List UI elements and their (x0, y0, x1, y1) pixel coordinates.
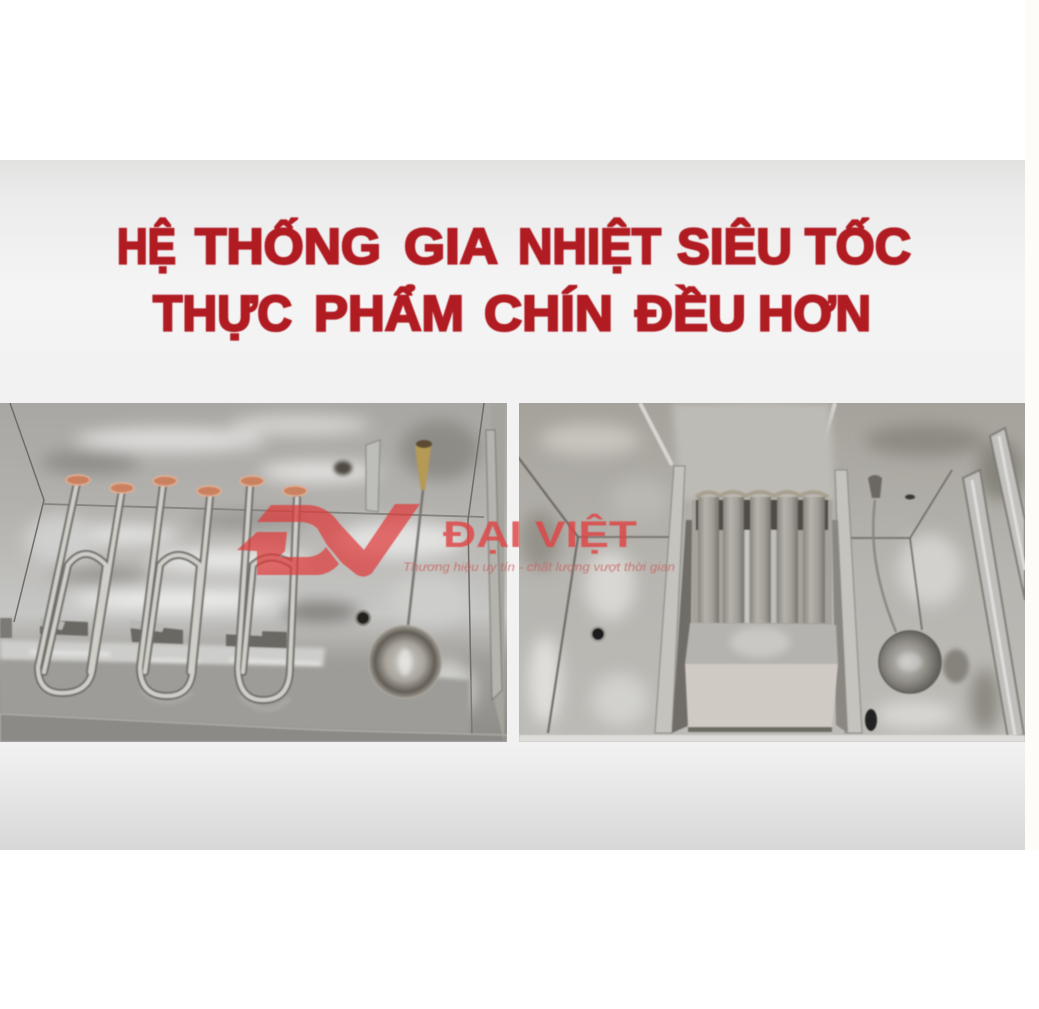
tagline: Thương hiệu uy tín - chất lượng vượt thời gian (403, 562, 675, 574)
heater elements (38, 483, 297, 700)
front lip (519, 735, 1025, 742)
burner recess (692, 500, 832, 625)
right tubes (963, 428, 1025, 738)
rails (655, 466, 862, 733)
title: ĐỀU (635, 286, 746, 342)
title: THỐNG (195, 218, 381, 274)
photo: electric heating tank (0, 403, 507, 742)
dark slot (865, 709, 877, 731)
drain hole (356, 611, 370, 625)
float valve (368, 440, 442, 699)
title: GIA (404, 218, 498, 274)
title (117, 218, 911, 342)
grey gradient banner (0, 160, 1025, 850)
bracket (366, 440, 380, 512)
dark weld mark (334, 461, 352, 475)
photo: gas burner tank (518, 403, 1025, 742)
floor (0, 661, 470, 734)
drain hole (591, 627, 605, 641)
side tube (492, 424, 505, 739)
title: HƠN (758, 286, 871, 342)
burner tubes (696, 492, 828, 623)
logo mark: DV with arrow (237, 504, 420, 577)
centre wall (672, 403, 835, 500)
bright shelf band (0, 640, 325, 668)
heater reflections (144, 693, 288, 710)
title: PHẨM (314, 286, 464, 342)
title: NHIỆT (518, 218, 661, 274)
title: TỐC (805, 218, 911, 274)
dark gaps behind tubes (696, 500, 828, 530)
brand name: ĐẠI VIỆT (443, 513, 637, 555)
right margin tint (1025, 0, 1039, 850)
title: CHÍN (484, 286, 613, 342)
heater clamps (0, 618, 287, 648)
float valve (868, 475, 969, 693)
title: SIÊU (677, 218, 792, 274)
front band (0, 714, 507, 742)
title: THỰC (153, 286, 292, 342)
copper terminals (66, 475, 307, 496)
burner box (685, 623, 838, 732)
watermark logo (237, 504, 675, 577)
title: HỆ (117, 218, 176, 274)
